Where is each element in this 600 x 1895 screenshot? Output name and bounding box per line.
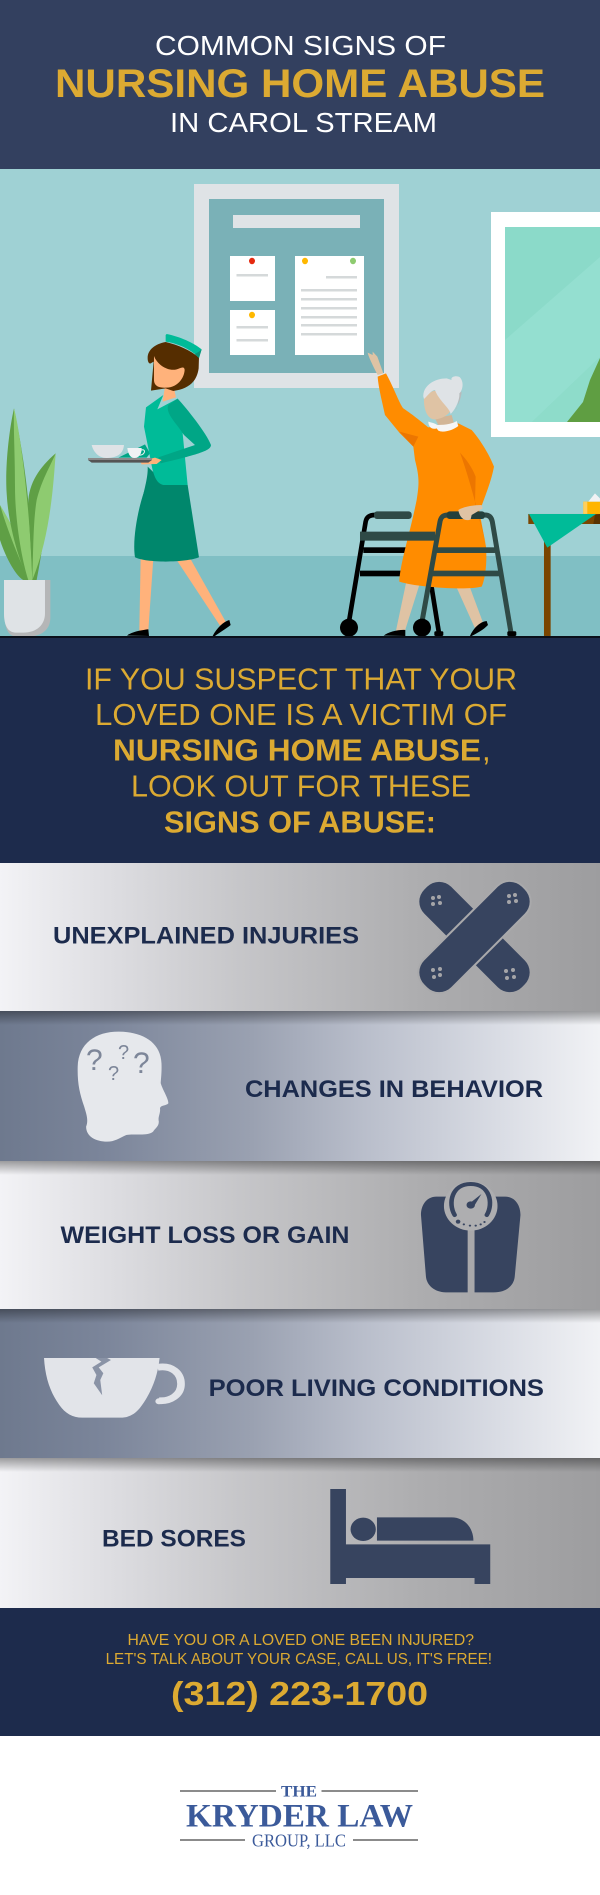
icon: person in bed [330,1489,490,1584]
title line 2: NURSING HOME ABUSE [55,62,545,106]
notice board [194,184,399,388]
label: WEIGHT LOSS OR GAIN [60,1222,350,1249]
icon: head with question marks [78,1032,168,1142]
intro line 5: SIGNS OF ABUSE: [164,805,436,840]
logo: kryder law: KRYDER LAW [186,1799,413,1835]
icon: crossed bandages [409,872,540,1002]
rear walker frame [340,511,443,637]
label: UNEXPLAINED INJURIES [53,922,359,949]
icon: head with question marks: ? [108,1063,119,1085]
label: BED SORES [102,1526,246,1553]
illustration: nursing home scene [0,169,600,638]
panel: bed sores [0,1458,600,1608]
icon: broken cup [44,1358,181,1418]
cta line 2: LET'S TALK ABOUT YOUR CASE, CALL US, IT'S FREE! [106,1651,492,1668]
panel: changes in behavior [0,1011,600,1161]
plant [0,408,56,637]
intro line 2: LOVED ONE IS A VICTIM OF [95,697,507,732]
phone number: (312) 223-1700 [171,1675,428,1712]
logo: group llc: GROUP, LLC [252,1831,346,1851]
title line 3: IN CAROL STREAM [170,107,437,138]
title line 1: COMMON SIGNS OF [155,30,446,61]
logo [180,1784,418,1851]
intro line 3 comma: , [482,733,491,768]
intro line 4: LOOK OUT FOR THESE [131,769,471,804]
icon: head with question marks: ? [118,1042,129,1064]
intro text panel [0,638,600,863]
logo: the: THE [281,1784,317,1801]
panel: weight loss or gain [0,1161,600,1309]
icon: weight scale [421,1181,520,1292]
label: POOR LIVING CONDITIONS [209,1375,544,1402]
cta line 1: HAVE YOU OR A LOVED ONE BEEN INJURED? [128,1632,474,1649]
table with tissue box [528,493,600,636]
intro line 1: IF YOU SUSPECT THAT YOUR [85,661,517,696]
elderly woman with walker [340,352,516,637]
header panel [0,0,600,169]
call to action panel [0,1608,600,1736]
intro line 3: NURSING HOME ABUSE [113,733,481,768]
panel: unexplained injuries [0,863,600,1011]
label: CHANGES IN BEHAVIOR [245,1076,543,1103]
icon: head with question marks: ? [133,1047,150,1080]
panel: poor living conditions [0,1309,600,1458]
window [491,212,600,437]
icon: head with question marks: ? [86,1044,103,1077]
front walker frame [360,511,516,637]
nurse [88,334,231,636]
